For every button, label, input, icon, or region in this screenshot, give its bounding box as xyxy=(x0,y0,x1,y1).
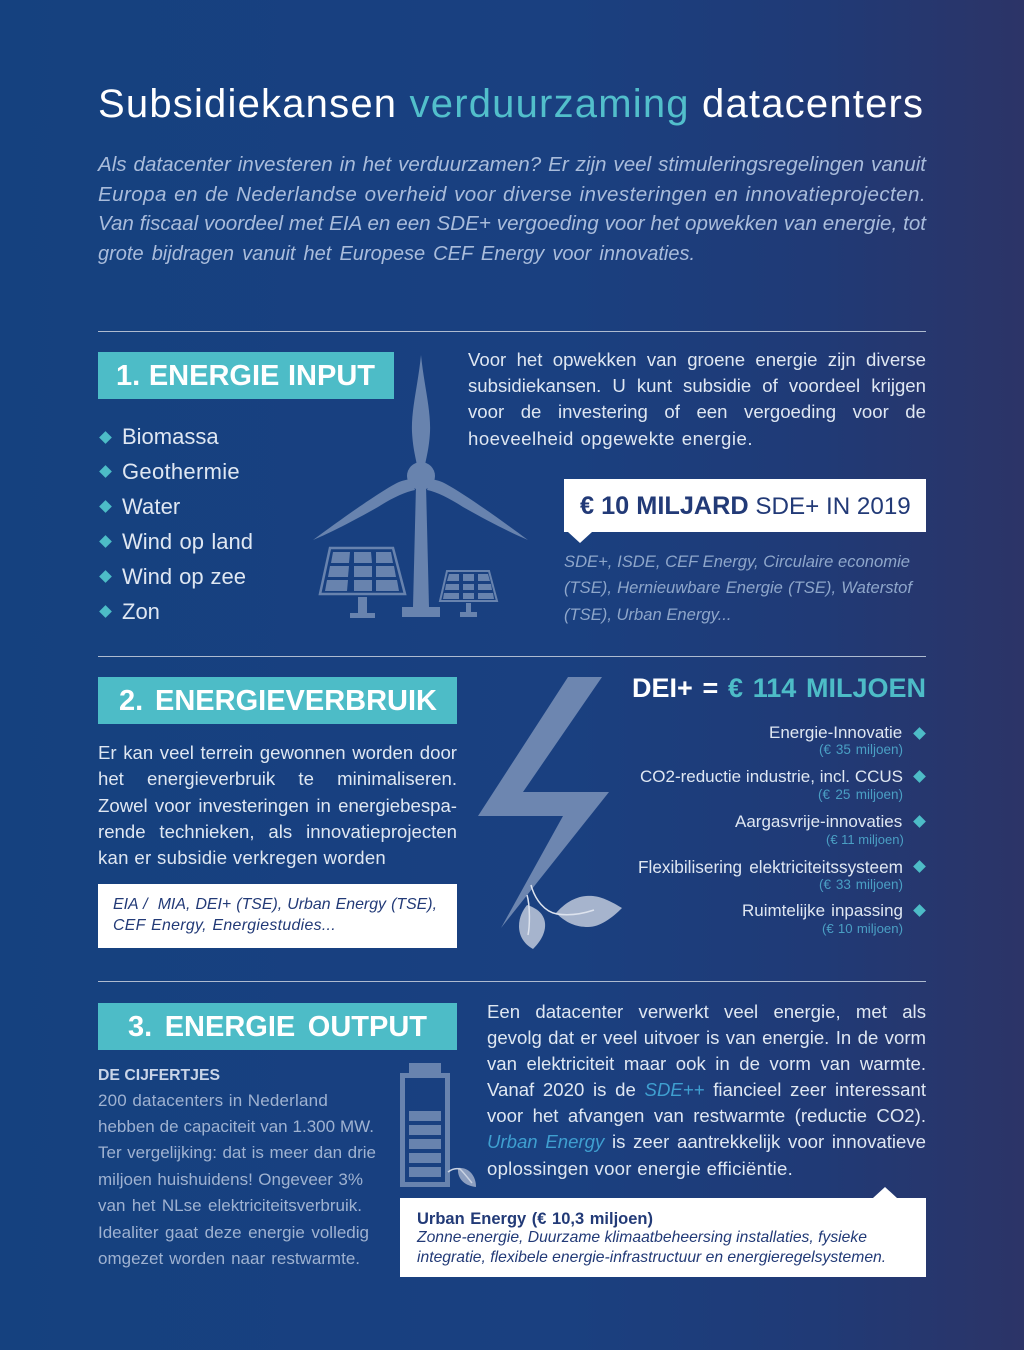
text: de cijfertjes: Idealiter gaat deze energie volledig xyxy=(98,1223,369,1242)
text: subsidy schemes: (TSE), Urban Energy... xyxy=(564,605,732,624)
intro text: Europa en de Nederlandse overheid voor diverse investeringen en innovatieprojecten. xyxy=(98,183,926,206)
callout: Urban Energy: Urban Energy (€ 10,3 miljoen) xyxy=(417,1210,653,1228)
icon: wind turbine with solar panels xyxy=(313,356,528,618)
callout: EIA MIA schemes xyxy=(98,884,457,948)
callout: Urban Energy: Zonne-energie, Duurzame klimaatbeheersing installaties, fysieke xyxy=(417,1229,867,1246)
text: de cijfertjes: van het NLse elektriciteitsverbruik. xyxy=(98,1196,362,1215)
item: Aargasvrije-innovaties xyxy=(735,812,926,847)
list: energy sources: Zon xyxy=(122,599,160,624)
item: Aargasvrije-innovaties: (€ 11 miljoen) xyxy=(826,832,904,847)
text: subsidy schemes: SDE+, ISDE, CEF Energy, Circulaire economie xyxy=(564,552,910,571)
item: Energie-Innovatie: (€ 35 miljoen) xyxy=(819,742,903,757)
text: energy input description: voor de investering of een vergoeding voor de xyxy=(468,401,926,422)
heading: 1. Energie input xyxy=(98,352,394,399)
text: energy output description xyxy=(487,1001,926,1179)
callout: EIA MIA schemes: CEF Energy, Energiestudies... xyxy=(113,917,336,934)
text: energy input description: Voor het opwekken van groene energie zijn diverse xyxy=(468,349,926,370)
text: energy input description xyxy=(468,349,926,449)
list: energy sources: Water xyxy=(122,494,180,519)
callout: 10 miljard SDE+ xyxy=(564,479,926,543)
item: Ruimtelijke inpassing: (€ 10 miljoen) xyxy=(822,921,903,936)
list: energy sources xyxy=(99,424,253,624)
text: energy use description: rende technieken, als innovatieprojecten xyxy=(98,821,457,842)
text: energy use description: Zowel voor investeringen in energiebespa- xyxy=(98,795,457,816)
item: Energie-Innovatie: Energie-Innovatie xyxy=(769,723,902,742)
callout: Urban Energy: integratie, flexibele energie-infrastructuur en energieregelsystemen. xyxy=(417,1249,886,1266)
text: energy output description: Vanaf 2020 is de SDE++ fiancieel zeer interessant xyxy=(487,1079,926,1100)
text: energy input description: hoeveelheid opgewekte energie. xyxy=(468,428,753,449)
list: energy sources: Wind op zee xyxy=(122,564,246,589)
text: energy output description: Een datacenter verwerkt veel energie, met als xyxy=(487,1001,926,1022)
item: CO2-reductie: (€ 25 miljoen) xyxy=(818,787,903,802)
text: de cijfertjes: hebben de capaciteit van 1.300 MW. xyxy=(98,1117,374,1136)
item: Aargasvrije-innovaties: Aargasvrije-innovaties xyxy=(735,812,902,831)
text: de cijfertjes: miljoen huishuidens! Ongeveer 3% xyxy=(98,1170,363,1189)
item: Flexibilisering: (€ 33 miljoen) xyxy=(819,877,903,892)
text: de cijfertjes: omgezet worden naar restwarmte. xyxy=(98,1249,360,1268)
intro text: Als datacenter investeren in het verduurzamen? Er zijn veel stimuleringsregelingen vanuit xyxy=(98,153,926,176)
heading: 2. Energieverbruik xyxy=(98,677,457,724)
intro text: Van fiscaal voordeel met EIA en een SDE+ vergoeding voor het opwekken van energie, tot xyxy=(98,212,926,235)
text: energy output description: Urban Energy is zeer aantrekkelijk voor innovatieve xyxy=(487,1131,926,1152)
text: subsidy schemes: (TSE), Hernieuwbare Energie (TSE), Waterstof xyxy=(564,578,912,597)
item: CO2-reductie: CO2-reductie industrie, incl. CCUS xyxy=(640,767,903,786)
item: Flexibilisering: Flexibilisering elektriciteitssysteem xyxy=(638,857,903,877)
item: Ruimtelijke inpassing xyxy=(742,901,926,936)
heading: 2. Energieverbruik: 2. ENERGIEVERBRUIK xyxy=(119,685,437,717)
list: energy sources: Wind op land xyxy=(122,529,253,554)
text: energy use description: het energieverbruik te minimaliseren. xyxy=(98,768,457,789)
heading: 3. Energie output: 3. ENERGIE OUTPUT xyxy=(128,1011,427,1043)
list: energy sources: Biomassa xyxy=(122,424,219,449)
item: Energie-Innovatie xyxy=(769,723,926,757)
text: energy use description: kan er subsidie verkregen worden xyxy=(98,847,386,868)
text: energy output description: van elektriciteit maar ook in de vorm van warmte. xyxy=(487,1053,926,1074)
text: energy input description: subsidiekansen. U kunt subsidie of voordeel krijgen xyxy=(468,375,926,396)
heading: DEI+ 114 miljoen: DEI+ = € 114 MILJOEN xyxy=(632,673,926,703)
text: de cijfertjes: Ter vergelijking: dat is meer dan drie xyxy=(98,1143,376,1162)
callout: 10 miljard SDE+: € 10 MILJARD SDE+ IN 2019 xyxy=(580,492,911,520)
icon: lightning bolt with leaves xyxy=(478,677,622,949)
intro text xyxy=(97,153,927,265)
text: de cijfertjes: DE CIJFERTJES xyxy=(98,1067,220,1084)
text: subsidy schemes xyxy=(564,552,914,624)
icon: battery with leaf xyxy=(400,1063,476,1187)
text: energy use description xyxy=(98,742,457,868)
text: energy output description: oplossingen voor energie efficiëntie. xyxy=(487,1158,793,1179)
text: energy output description: voor het afvangen van restwarmte (reductie CO2). xyxy=(487,1105,926,1126)
item: CO2-reductie xyxy=(640,767,926,802)
title: Subsidiekansen verduurzaming datacenters xyxy=(98,82,924,126)
list: DEI+ categories xyxy=(638,723,926,936)
callout: EIA MIA schemes: EIA / MIA, DEI+ (TSE), Urban Energy (TSE), xyxy=(113,896,437,913)
heading: 3. Energie output xyxy=(98,1003,457,1050)
heading: 1. Energie input: 1. ENERGIE INPUT xyxy=(116,360,375,392)
item: Flexibilisering xyxy=(638,857,926,892)
text: de cijfertjes xyxy=(98,1067,376,1268)
text: energy use description: Er kan veel terrein gewonnen worden door xyxy=(98,742,457,763)
text: energy output description: gevolg dat er veel uitvoer is van energie. In de vorm xyxy=(487,1027,926,1048)
intro text: grote bijdragen vanuit het Europese CEF Energy voor innovaties. xyxy=(98,243,695,265)
text: de cijfertjes: 200 datacenters in Nederland xyxy=(98,1091,328,1110)
list: energy sources: Geothermie xyxy=(122,459,240,484)
item: Ruimtelijke inpassing: Ruimtelijke inpassing xyxy=(742,901,903,920)
callout: Urban Energy xyxy=(400,1187,926,1277)
